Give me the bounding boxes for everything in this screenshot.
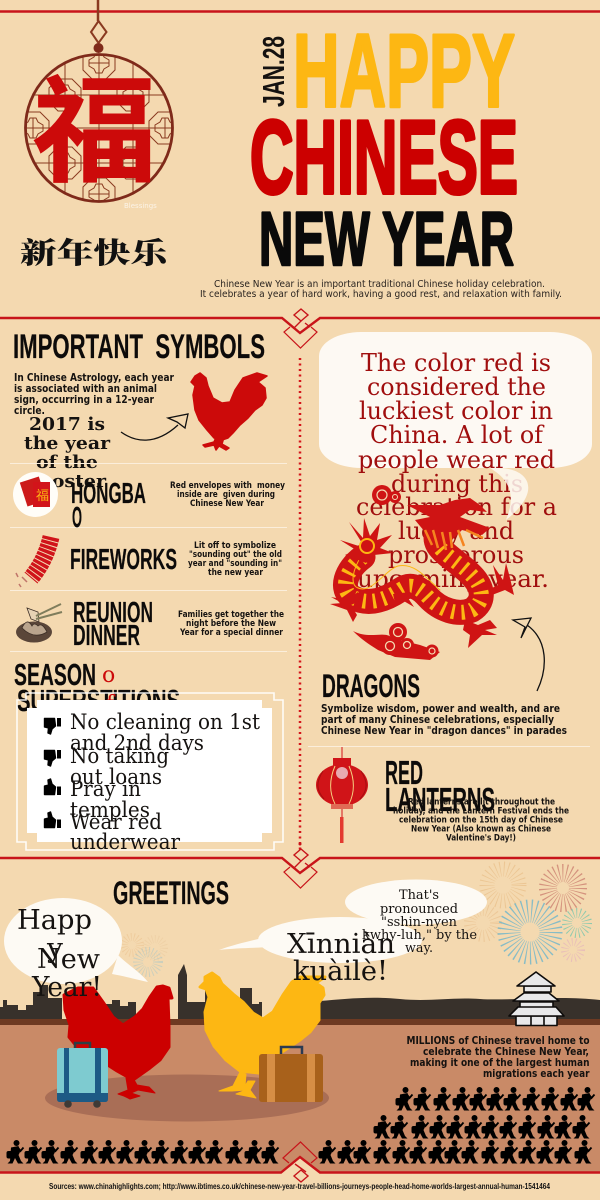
lucky red text: considered the	[367, 373, 546, 401]
dragons text: Chinese New Year in "dragon dances" in parades	[321, 725, 567, 737]
heading: fireworks: FIREWORKS	[70, 544, 177, 576]
migration text: MILLIONS of Chinese travel home to	[406, 1035, 590, 1047]
scene: skyline and ground	[0, 964, 600, 1172]
heading: red lanterns: LANTERNS	[385, 781, 495, 818]
fireworks text: Lit off to symbolize	[194, 541, 276, 551]
row: fireworks	[16, 537, 282, 587]
speech bubble: pronunciation: Xīnniàn	[287, 929, 395, 960]
icon: dragon	[330, 485, 514, 648]
dotted center divider	[299, 358, 301, 850]
speech bubble: pronunciation: That's	[399, 888, 439, 903]
panel: important symbols	[10, 328, 287, 652]
speech bubble: pronunciation: way.	[405, 941, 433, 956]
rooster callout	[24, 414, 111, 492]
hongbao text	[170, 481, 286, 509]
heading: reunion dinner: REUNION	[73, 597, 153, 629]
astrology text: In Chinese Astrology, each year	[14, 372, 174, 384]
heading: season of superstitions: o	[102, 663, 115, 688]
hongbao text: inside are given during	[177, 490, 275, 500]
panel: red lanterns	[316, 747, 569, 844]
list: superstitions	[44, 710, 261, 854]
heading: season of superstitions	[14, 657, 180, 718]
lanterns text: holiday, and the Lantern Festival ends the	[393, 806, 569, 816]
rooster callout: of the	[36, 452, 98, 473]
fireworks text: year and "sounding in"	[188, 559, 282, 569]
icon: red rooster walking	[64, 986, 172, 1099]
fireworks text: the new year	[208, 568, 263, 578]
icon: yellow rooster walking	[200, 973, 325, 1098]
footer band	[0, 1157, 600, 1200]
travellers: right rows	[318, 1087, 594, 1164]
lanterns text: New Year (Also known as Chinese	[411, 824, 551, 834]
footer frame line	[0, 1157, 600, 1172]
rooster callout: rooster	[29, 471, 107, 492]
heading: hongbao: HONGBA	[71, 478, 146, 510]
header panel	[17, 0, 562, 300]
lucky red text: celebration for a	[356, 493, 557, 521]
lucky red text: during this	[391, 470, 523, 498]
icon: red rooster	[191, 373, 267, 450]
ornament: fu lantern: Blessings	[124, 202, 157, 210]
item: pray: Pray in	[70, 777, 141, 801]
ornament: bottom divider knot	[283, 1142, 317, 1182]
item: red underwear: underwear	[70, 830, 181, 854]
item: no cleaning: No cleaning on 1st	[70, 710, 261, 734]
icon: dumplings and chopsticks	[16, 604, 62, 642]
speech bubble: pronunciation: kuàilè!	[293, 956, 388, 987]
heading: red lanterns	[385, 754, 495, 818]
icon: red envelopes: 福	[36, 485, 49, 504]
dragons text: part of many Chinese celebrations, especially	[321, 714, 554, 726]
item: pray	[44, 777, 150, 822]
heading: hongbao: O	[72, 502, 82, 534]
speech bubble: happy new year: y	[46, 933, 64, 964]
panel: season of superstitions	[14, 657, 283, 854]
lanterns text: Valentine's Day!)	[446, 834, 516, 844]
migration text: migrations each year	[483, 1068, 590, 1080]
chinese greeting: 新年快乐	[20, 231, 171, 272]
speech bubble: happy new year: New	[37, 944, 100, 975]
lanterns text	[393, 798, 569, 844]
icon: lantern	[316, 747, 368, 843]
travellers: left row	[6, 1140, 278, 1164]
panel: dragon	[319, 332, 592, 737]
item: no loans: out loans	[70, 765, 162, 789]
migration text: making it one of the largest human	[410, 1057, 590, 1069]
icon: cloud	[353, 623, 440, 660]
lucky red text	[356, 349, 557, 593]
reunion text: Families get together the	[178, 610, 284, 620]
migration text: celebrate the Chinese New Year,	[423, 1046, 589, 1058]
section frame lines	[0, 12, 600, 873]
astrology text: circle.	[14, 405, 45, 417]
reunion text: night before the New	[186, 619, 276, 629]
rooster callout: the year	[24, 433, 111, 454]
icon: firecracker	[16, 537, 51, 587]
lucky red text: China. A lot of	[370, 421, 545, 449]
speech bubble: happy new year: Happ	[17, 905, 92, 936]
heading: season of superstitions: SEASON	[14, 657, 96, 692]
item: no cleaning	[44, 710, 261, 755]
astrology text	[14, 372, 174, 417]
lucky red text: upcoming year.	[357, 565, 549, 593]
item: red underwear: Wear red	[70, 810, 162, 834]
speech bubble: lucky red	[319, 332, 592, 468]
intro text: Chinese New Year is an important traditional Chinese holiday celebration.	[214, 279, 545, 290]
heading: season of superstitions: f	[106, 692, 116, 717]
row: hongbao	[13, 472, 286, 534]
hongbao text: Red envelopes with money	[170, 481, 286, 491]
speech bubble tail	[490, 468, 528, 520]
intro text: It celebrates a year of hard work, having a good rest, and relaxation with family.	[200, 289, 562, 300]
ornament: fu lantern: 福	[32, 38, 157, 206]
arrow to dragon	[513, 618, 544, 691]
item: no loans: No taking	[70, 744, 169, 768]
heading: hongbao	[71, 478, 146, 534]
panel: greetings	[0, 869, 600, 1172]
heading: season of superstitions: SUPERSTITIONS	[17, 683, 180, 718]
icon: brown suitcase	[259, 1047, 323, 1102]
lucky red text: The color red is	[361, 349, 551, 377]
intro text	[200, 279, 562, 300]
fireworks text: "sounding out" the old	[189, 550, 282, 560]
row divider line	[308, 746, 590, 748]
date: JAN.28	[256, 36, 291, 107]
speech bubble: pronunciation: pronounced	[380, 902, 458, 917]
icon: blue suitcase	[57, 1043, 108, 1108]
ground shadow	[45, 1074, 329, 1122]
item: no cleaning: and 2nd days	[70, 731, 204, 755]
heading: red lanterns: RED	[385, 754, 423, 791]
speech bubble: pronunciation	[219, 880, 487, 987]
ornament: middle divider knot	[284, 842, 317, 888]
speech bubble: happy new year: Year!	[31, 972, 102, 1003]
dragons text	[321, 703, 567, 737]
heading: important symbols: IMPORTANT SYMBOLS	[13, 328, 265, 366]
lucky red text: lucky and	[398, 517, 514, 545]
ornament: top divider knot	[284, 309, 317, 348]
card: superstitions	[27, 700, 272, 842]
lucky red text: luckiest color in	[359, 397, 553, 425]
faint fireworks	[124, 937, 164, 972]
heading: reunion dinner: DINNER	[73, 620, 140, 652]
item: red underwear	[44, 810, 181, 854]
row: reunion dinner	[16, 597, 284, 652]
dragons text: Symbolize wisdom, power and wealth, and are	[321, 703, 560, 715]
lucky red text: prosperous	[388, 541, 524, 569]
item: pray: temples	[70, 798, 150, 822]
heading: greetings: GREETINGS	[113, 875, 229, 911]
astrology text: is associated with an animal	[14, 383, 157, 395]
migration text	[406, 1035, 590, 1080]
fireworks cluster	[470, 869, 587, 958]
astrology text: sign, occurring in a 12-year	[14, 394, 154, 406]
arrow to rooster	[121, 414, 188, 440]
heading: dragons: DRAGONS	[322, 668, 420, 704]
icon: red envelopes	[13, 472, 58, 517]
row divider lines	[10, 464, 287, 652]
lanterns text: Red lanterns are lit throughout the	[408, 798, 555, 808]
reunion text	[178, 610, 284, 638]
reunion text: Year for a special dinner	[179, 628, 283, 638]
speech bubble: pronunciation: "sshin-nyen	[381, 915, 458, 930]
fireworks text	[188, 541, 282, 578]
hongbao text: Chinese New Year	[190, 499, 264, 509]
lanterns text: celebration on the 15th day of Chinese	[399, 816, 563, 826]
speech bubble: pronunciation: kwhy-luh," by the	[362, 928, 477, 943]
item: no loans	[44, 744, 169, 789]
frame: superstitions outline	[17, 693, 283, 850]
rooster callout: 2017 is	[29, 414, 105, 435]
ornament: fu lantern	[17, 0, 181, 210]
icon: pagoda	[509, 972, 564, 1026]
heading: reunion dinner	[73, 597, 153, 652]
lucky red text: people wear red	[358, 446, 555, 474]
speech bubble: happy new year	[4, 898, 148, 1003]
